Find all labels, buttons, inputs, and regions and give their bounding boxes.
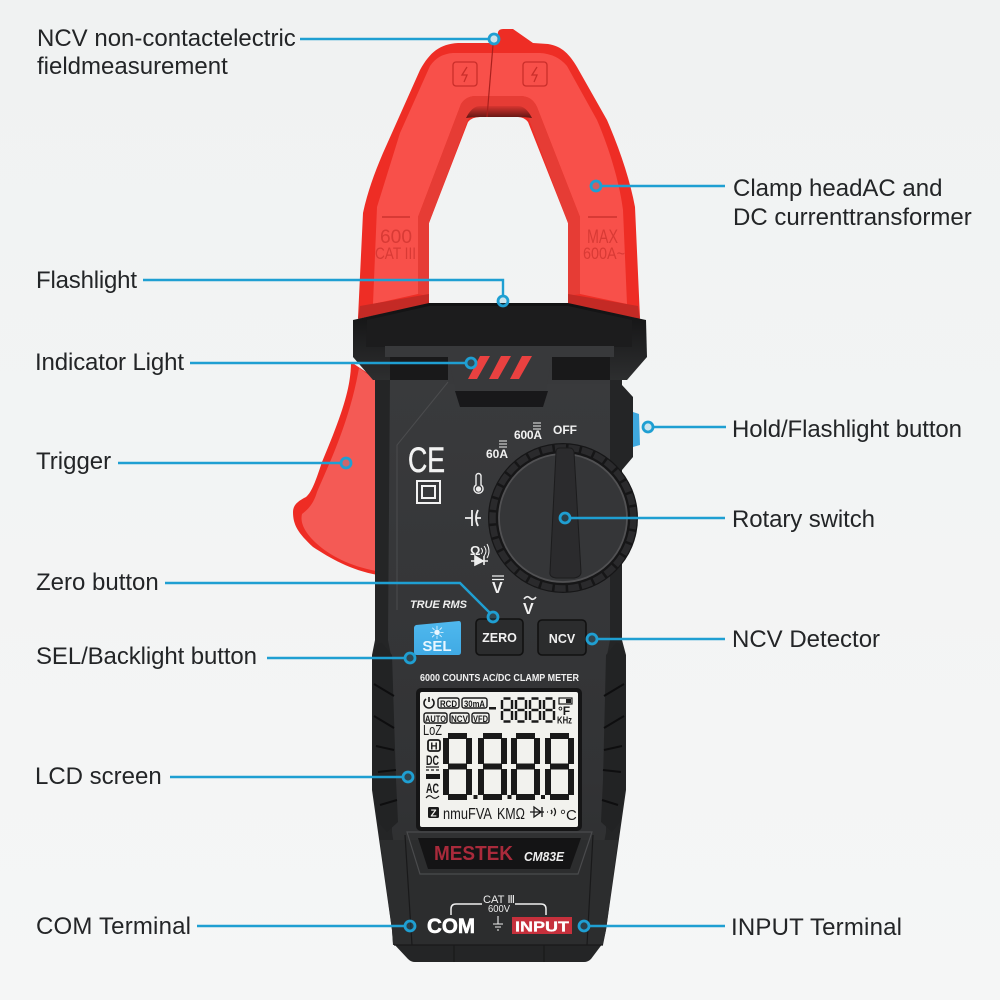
dial labels: OFF	[553, 423, 577, 437]
LCD screen	[416, 688, 582, 831]
resistance and diode symbols: Ω	[470, 543, 480, 558]
status tag RCD: RCD	[440, 699, 457, 710]
icon: power	[424, 697, 434, 708]
clamp left marking: CAT III	[375, 244, 416, 263]
SEL button: SEL	[422, 638, 452, 655]
icon: double insulation	[417, 481, 440, 503]
callout: NCV detector: NCV Detector	[732, 626, 880, 653]
callout: rotary switch	[560, 506, 875, 533]
AC tag	[426, 780, 439, 798]
status tag VFD: VFD	[473, 714, 488, 724]
Z tag	[428, 807, 439, 820]
clamp left marking	[375, 216, 416, 263]
unit row: nmuFVA	[443, 806, 492, 823]
rotary pointer	[550, 448, 581, 578]
callout: indicator light	[35, 349, 476, 376]
meter body	[353, 303, 647, 962]
status tag AUTO: AUTO	[425, 714, 446, 724]
left grip	[372, 643, 398, 832]
dial labels: 600A	[514, 428, 542, 442]
callout: rotary switch: Rotary switch	[732, 506, 875, 533]
AC tag: AC	[426, 780, 439, 796]
dial labels: V	[492, 580, 503, 597]
callout: flashlight: Flashlight	[36, 267, 137, 294]
dial labels: V	[523, 601, 534, 618]
callout: SEL button: SEL/Backlight button	[36, 643, 257, 670]
callout: zero button: Zero button	[36, 569, 159, 596]
rotary switch	[488, 443, 638, 593]
terminal markings: CAT Ⅲ	[483, 894, 515, 906]
minus bar	[426, 774, 440, 779]
unit KHz: KHz	[557, 716, 572, 726]
callout: indicator light: Indicator Light	[35, 349, 184, 376]
unit F: °F	[558, 704, 570, 718]
callout: clamp head: Clamp headAC and	[733, 175, 942, 202]
Z tag: Z	[430, 808, 437, 820]
callout: NCV sensing	[37, 25, 499, 80]
model caption: 6000 COUNTS AC/DC CLAMP METER	[420, 673, 580, 684]
callout: trigger: Trigger	[36, 448, 111, 475]
brand plate	[407, 832, 592, 874]
callout: trigger	[36, 448, 351, 475]
terminal markings	[427, 894, 572, 938]
callout: clamp head: DC currenttransformer	[733, 204, 972, 231]
clamp left marking: 600	[380, 227, 412, 248]
callout: clamp head	[591, 175, 972, 231]
hold tag: H	[430, 742, 438, 752]
icon: trigger	[293, 362, 378, 575]
clamp base lip	[358, 294, 640, 319]
DC tag	[426, 752, 439, 770]
clamp inner shadow	[466, 106, 532, 118]
unit C: °C	[560, 807, 577, 824]
clamp right marking: 600A~	[583, 244, 625, 263]
icon: thermometer	[474, 474, 483, 493]
unit row resistance: KMΩ	[497, 806, 525, 823]
body silhouette	[372, 370, 633, 962]
true rms label: TRUE RMS	[410, 599, 468, 611]
clamp inner band left	[418, 96, 484, 296]
top cap	[353, 303, 647, 384]
NCV button: NCV	[549, 632, 576, 646]
minus sign	[489, 707, 496, 710]
callout: LCD screen: LCD screen	[35, 763, 162, 790]
resistance and diode symbols	[470, 543, 489, 565]
right grip	[601, 643, 626, 832]
terminal markings: COM	[427, 915, 475, 938]
body front face	[388, 380, 610, 945]
clamp head	[358, 29, 640, 319]
icon: CE mark: CE	[408, 441, 445, 480]
brand plate: CM83E	[524, 850, 565, 864]
ZERO button: ZERO	[482, 631, 517, 645]
bottom seams	[394, 835, 603, 962]
icon: right lightning box	[523, 62, 547, 86]
callout: INPUT terminal	[579, 914, 902, 941]
terminal markings: 600V	[488, 904, 510, 915]
callout: zero button	[36, 569, 498, 622]
brand plate: MESTEK	[434, 843, 514, 865]
status tag NCV: NCV	[451, 714, 468, 724]
clamp seam	[487, 45, 493, 117]
clamp right marking: MAX	[587, 227, 618, 248]
main digits	[446, 736, 571, 797]
status tag 30mA: 30mA	[464, 699, 485, 710]
callout: INPUT terminal: INPUT Terminal	[731, 914, 902, 941]
icon: capacitor	[465, 510, 481, 526]
clamp right marking	[583, 216, 625, 263]
dial labels	[465, 423, 577, 618]
indicator light stripes	[468, 356, 532, 379]
icon: hold button	[633, 412, 640, 447]
NCV button	[538, 620, 586, 655]
SEL button	[414, 621, 461, 655]
secondary digits	[502, 698, 554, 722]
callout: hold button: Hold/Flashlight button	[732, 416, 962, 443]
callout: COM terminal: COM Terminal	[36, 913, 191, 940]
DC tag: DC	[426, 752, 439, 768]
ZERO button	[476, 619, 523, 655]
callout: SEL button	[36, 643, 415, 670]
clamp inner band right	[484, 96, 580, 296]
clamp light face	[373, 53, 627, 304]
hold tag	[428, 740, 440, 752]
SEL button: ☀	[429, 623, 445, 643]
dial labels: 60A	[486, 447, 508, 461]
lower block	[380, 840, 618, 945]
decimal points	[474, 795, 545, 799]
face crease	[397, 382, 448, 610]
icon: diode and buzzer	[530, 807, 556, 817]
callout: LCD screen	[35, 763, 413, 790]
callout: flashlight	[36, 267, 508, 306]
icon: left lightning box	[453, 62, 477, 86]
terminal markings: INPUT	[515, 918, 569, 936]
icon: battery	[559, 698, 572, 704]
LoZ: LoZ	[423, 722, 442, 739]
callout: NCV sensing: NCV non-contactelectric	[37, 25, 296, 52]
callout: NCV detector	[587, 626, 880, 653]
indicator recess	[448, 357, 552, 407]
callout: COM terminal	[36, 913, 415, 940]
callout: NCV sensing: fieldmeasurement	[37, 53, 228, 80]
